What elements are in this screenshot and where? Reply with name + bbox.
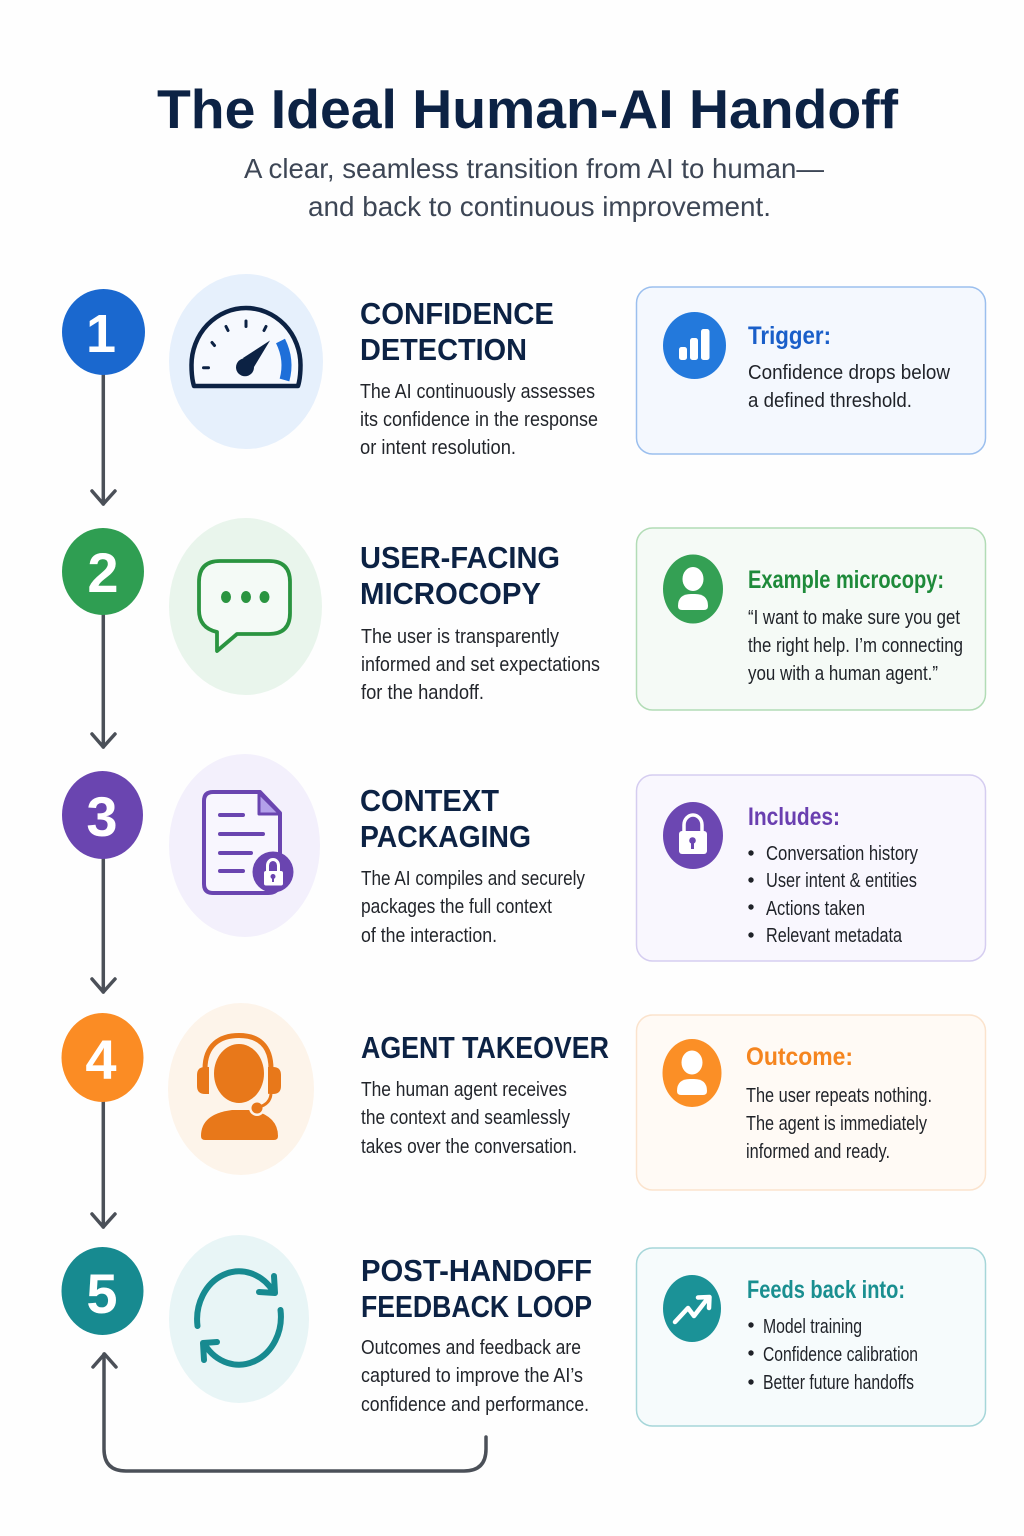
panel text: example microcopy: “I want to make sure you get [748,606,960,629]
panel text: trigger: a defined threshold. [748,389,912,412]
panel list: feeds back into: Model training [763,1315,862,1338]
number badge 5: 5 [86,1262,118,1325]
number badge 5 [62,1247,144,1335]
body text: step 3: of the interaction. [361,924,497,947]
heading: post-handoff feedback loop: FEEDBACK LOOP [361,1289,592,1324]
body text: step 5: confidence and performance. [361,1393,589,1416]
panel text: example microcopy: the right help. I’m connecting [748,634,963,657]
panel text: outcome: informed and ready. [746,1140,890,1163]
arrow: step 4 to 5 [92,1102,115,1227]
panel heading: example microcopy: Example microcopy: [748,566,944,594]
icon: person [663,554,723,624]
number badge 2: 2 [87,541,119,604]
icon: padlock [663,802,723,869]
body text: step 1 [360,380,598,459]
heading: confidence detection: CONFIDENCE [360,296,554,331]
body text: step 2: The user is transparently [361,625,560,648]
panel list: includes: Actions taken [766,897,865,920]
panel list: includes: Relevant metadata [766,924,902,947]
heading: user-facing microcopy: USER-FACING [360,540,560,575]
heading: confidence detection: DETECTION [360,332,527,367]
panel: feeds back into [636,1248,986,1426]
heading: user-facing microcopy: MICROCOPY [360,576,541,611]
number badge 3: 3 [86,785,118,848]
icon: document with lock [169,754,320,937]
icon: trend arrow [663,1275,721,1342]
body text: step 3: The AI compiles and securely [361,867,586,890]
step 1: confidence detection [62,274,986,504]
step 5: post-handoff feedback loop [62,1235,986,1471]
panel heading: outcome: Outcome: [746,1043,853,1071]
panel: trigger [636,287,986,454]
panel list: feeds back into [748,1315,918,1394]
panel heading: includes: Includes: [748,803,840,831]
heading: confidence detection [360,296,554,367]
body text: step 2: informed and set expectations [361,653,600,676]
body text: step 2: for the handoff. [361,681,484,704]
arrow: step 1 to 2 [92,375,115,504]
body text: step 5: captured to improve the AI’s [361,1364,583,1387]
title: The Ideal Human-AI Handoff [157,78,899,140]
number badge 4: 4 [85,1028,117,1091]
body text: step 1: The AI continuously assesses [360,380,595,403]
number badge 1: 1 [86,304,116,364]
icon: agent with headset [168,1003,314,1175]
heading: context packaging: CONTEXT [360,783,499,818]
icon: refresh loop [169,1235,309,1403]
panel heading: feeds back into: Feeds back into: [747,1276,905,1304]
panel text: example microcopy: you with a human agent.” [748,662,938,685]
body text: step 4: The human agent receives [361,1078,567,1101]
panel list: includes: Conversation history [766,842,919,865]
step 3: context packaging [62,754,986,992]
panel list: includes [748,842,919,947]
body text: step 4: takes over the conversation. [361,1135,577,1158]
heading: context packaging [360,783,531,854]
arrow: feedback loop back to step 5 [93,1354,486,1471]
number badge 3 [62,771,143,859]
panel text: example microcopy [748,606,963,685]
icon: speedometer gauge [169,274,323,449]
subtitle: A clear, seamless transition from AI to human— [244,153,824,184]
number badge 2 [62,528,144,615]
step 2: user-facing microcopy [62,518,986,747]
panel: example microcopy [636,528,986,710]
body text: step 3 [361,867,586,947]
panel: includes [636,775,986,961]
subtitle [244,153,824,222]
body text: step 1: its confidence in the response [360,408,598,431]
panel text: outcome [746,1084,932,1163]
panel text: trigger: Confidence drops below [748,361,950,384]
icon: chat bubble [169,518,322,695]
arrow: step 2 to 3 [92,615,115,747]
body text: step 5 [361,1336,589,1416]
number badge 4 [62,1013,144,1102]
body text: step 2 [361,625,600,704]
body text: step 5: Outcomes and feedback are [361,1336,581,1359]
panel text: outcome: The agent is immediately [746,1112,928,1135]
body text: step 1: or intent resolution. [360,436,516,459]
panel list: includes: User intent & entities [766,869,917,892]
heading: context packaging: PACKAGING [360,819,531,854]
panel text: trigger [748,361,950,412]
panel list: feeds back into: Better future handoffs [763,1371,914,1394]
heading: user-facing microcopy [360,540,560,611]
body text: step 4: the context and seamlessly [361,1106,571,1129]
subtitle: and back to continuous improvement. [308,191,771,222]
heading: agent takeover: AGENT TAKEOVER [361,1030,609,1065]
step 4: agent takeover [62,1003,986,1227]
icon: person [662,1039,722,1107]
panel: outcome [636,1015,986,1190]
panel list: feeds back into: Confidence calibration [763,1343,918,1366]
arrow: step 3 to 4 [92,859,115,992]
icon: bar chart [663,312,726,379]
heading: post-handoff feedback loop [361,1253,592,1324]
heading: post-handoff feedback loop: POST-HANDOFF [361,1253,592,1288]
number badge 1 [62,289,145,375]
body text: step 3: packages the full context [361,895,552,918]
body text: step 4 [361,1078,577,1158]
panel heading: trigger: Trigger: [748,322,831,350]
panel text: outcome: The user repeats nothing. [746,1084,932,1107]
